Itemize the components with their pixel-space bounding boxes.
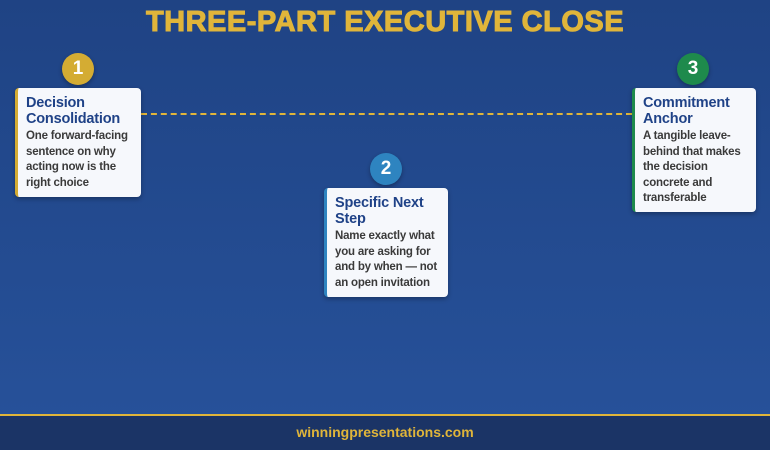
card: commitment anchor: [632, 88, 756, 212]
icon: number 3: [677, 53, 709, 85]
card: specific next step: Specific Next Step: [335, 195, 423, 227]
icon: number 2: [370, 153, 402, 185]
card: specific next step: [324, 188, 448, 297]
card: specific next step: you are asking for: [335, 246, 430, 258]
footer: [0, 414, 770, 450]
card: decision consolidation: [15, 88, 141, 197]
icon: number 3: 3: [688, 58, 698, 79]
card: specific next step: Name exactly what: [335, 230, 435, 242]
icon: number 1: [62, 53, 94, 85]
card: commitment anchor: Commitment Anchor: [643, 95, 730, 127]
icon: number 1: 1: [73, 58, 83, 79]
card: commitment anchor: transferable: [643, 192, 706, 204]
card: commitment anchor: A tangible leave-: [643, 130, 731, 142]
card: decision consolidation: right choice: [26, 176, 89, 188]
card: commitment anchor: behind that makes: [643, 146, 741, 158]
card: specific next step: an open invitation: [335, 276, 430, 288]
footer: winningpresentations.com: [296, 424, 474, 440]
card: decision consolidation: sentence on why: [26, 146, 116, 158]
card: decision consolidation: Decision Consolidation: [26, 95, 120, 127]
dashed connector: [141, 113, 632, 115]
card: decision consolidation: One forward-facing: [26, 130, 128, 142]
card: decision consolidation: acting now is the: [26, 161, 116, 173]
card: specific next step: and by when — not: [335, 261, 437, 273]
card: commitment anchor: concrete and: [643, 176, 712, 188]
title: THREE-PART EXECUTIVE CLOSE: [146, 6, 624, 38]
icon: number 2: 2: [381, 158, 391, 179]
card: commitment anchor: the decision: [643, 161, 708, 173]
